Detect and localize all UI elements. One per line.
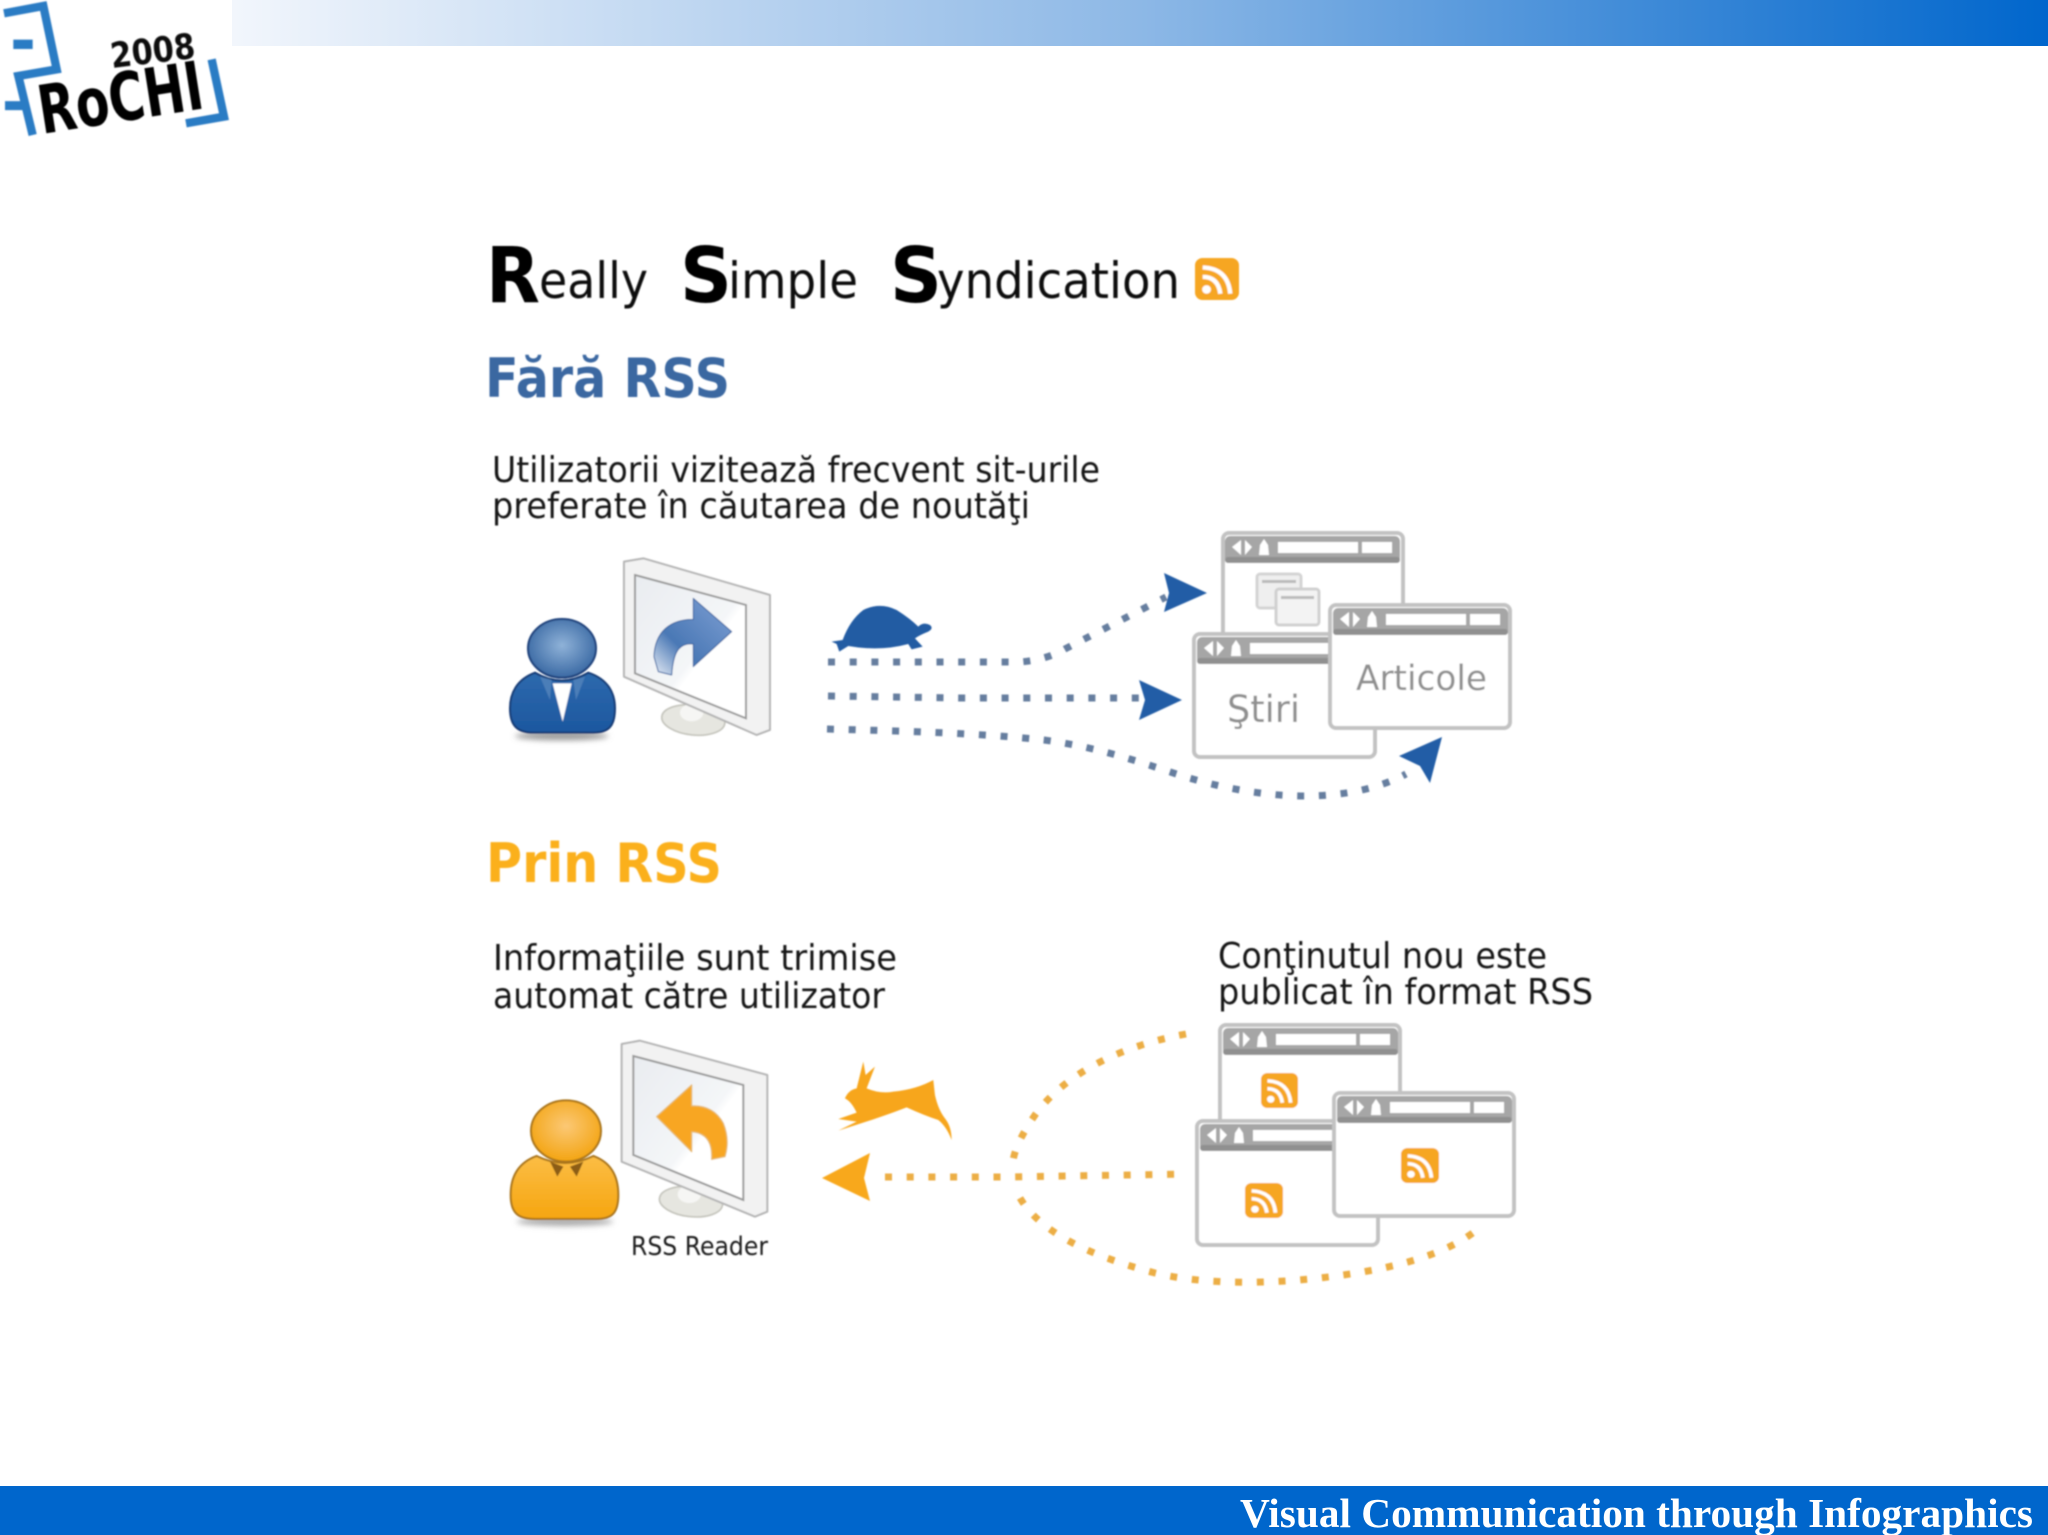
text: new content published bbox=[1218, 936, 1593, 1013]
title: Really Simple Syndication: S bbox=[890, 232, 942, 321]
dotted arrow: to Articole window bbox=[827, 729, 1442, 796]
window: right RSS bbox=[1334, 1093, 1514, 1216]
window: back RSS bbox=[1220, 1025, 1400, 1155]
dotted arrow: to Stiri window bbox=[828, 680, 1182, 720]
footer text: Visual Communication through Infographics bbox=[1240, 1490, 2033, 1535]
heading: Prin RSS: Prin RSS bbox=[486, 832, 722, 895]
header gradient bar bbox=[232, 0, 2048, 46]
icon: RSS title bbox=[1195, 258, 1239, 300]
heading: Fara RSS: Fără RSS bbox=[485, 347, 730, 410]
title: Really Simple Syndication: eally bbox=[539, 252, 648, 310]
main infographic bbox=[485, 232, 1593, 1282]
logo: RoCHI 2008: RoCHI bbox=[32, 47, 208, 150]
title: Really Simple Syndication: imple bbox=[728, 252, 858, 310]
text: new content published: Conţinutul nou este bbox=[1218, 936, 1547, 977]
window: back blue group bbox=[1223, 533, 1403, 663]
text: new content published: publicat în format RSS bbox=[1218, 972, 1593, 1013]
icon: orange user bbox=[511, 1100, 618, 1226]
footer bar bbox=[0, 1486, 2048, 1535]
dotted arc: lower feed bbox=[1020, 1198, 1474, 1282]
label: RSS Reader: RSS Reader bbox=[631, 1232, 768, 1262]
icon: blue user bbox=[510, 619, 615, 740]
logo: RoCHI 2008 bbox=[4, 6, 224, 150]
window: Stiri: Ştiri bbox=[1227, 688, 1300, 731]
text: users visit sites: preferate în căutarea de noutăţi bbox=[492, 486, 1030, 527]
text: information pushed bbox=[493, 938, 897, 1017]
window: Articole bbox=[1330, 605, 1510, 728]
title: Really Simple Syndication: S bbox=[680, 232, 732, 321]
window: Stiri bbox=[1194, 634, 1375, 757]
icon: monitor with back arrow bbox=[622, 1041, 767, 1220]
text: users visit sites bbox=[492, 450, 1100, 527]
logo: RoCHI 2008: 2008 bbox=[108, 27, 197, 77]
title: Really Simple Syndication: yndication bbox=[937, 252, 1180, 310]
icon: turtle bbox=[832, 606, 932, 652]
dotted arrow: to top window bbox=[828, 573, 1207, 662]
dotted arc: upper feed bbox=[1012, 1034, 1186, 1172]
text: information pushed: Informaţiile sunt trimise bbox=[493, 938, 897, 979]
title: Really Simple Syndication: R bbox=[486, 232, 540, 321]
text: information pushed: automat către utilizator bbox=[493, 976, 885, 1017]
icon: monitor with forward arrow bbox=[624, 558, 770, 738]
icon: rabbit bbox=[838, 1062, 952, 1140]
title: Really Simple Syndication bbox=[486, 232, 1180, 321]
window: left RSS bbox=[1197, 1121, 1378, 1245]
dotted arrow: to RSS reader bbox=[822, 1153, 1186, 1201]
text: users visit sites: Utilizatorii vizitează frecvent sit-urile bbox=[492, 450, 1100, 491]
window: Articole: Articole bbox=[1356, 659, 1487, 699]
